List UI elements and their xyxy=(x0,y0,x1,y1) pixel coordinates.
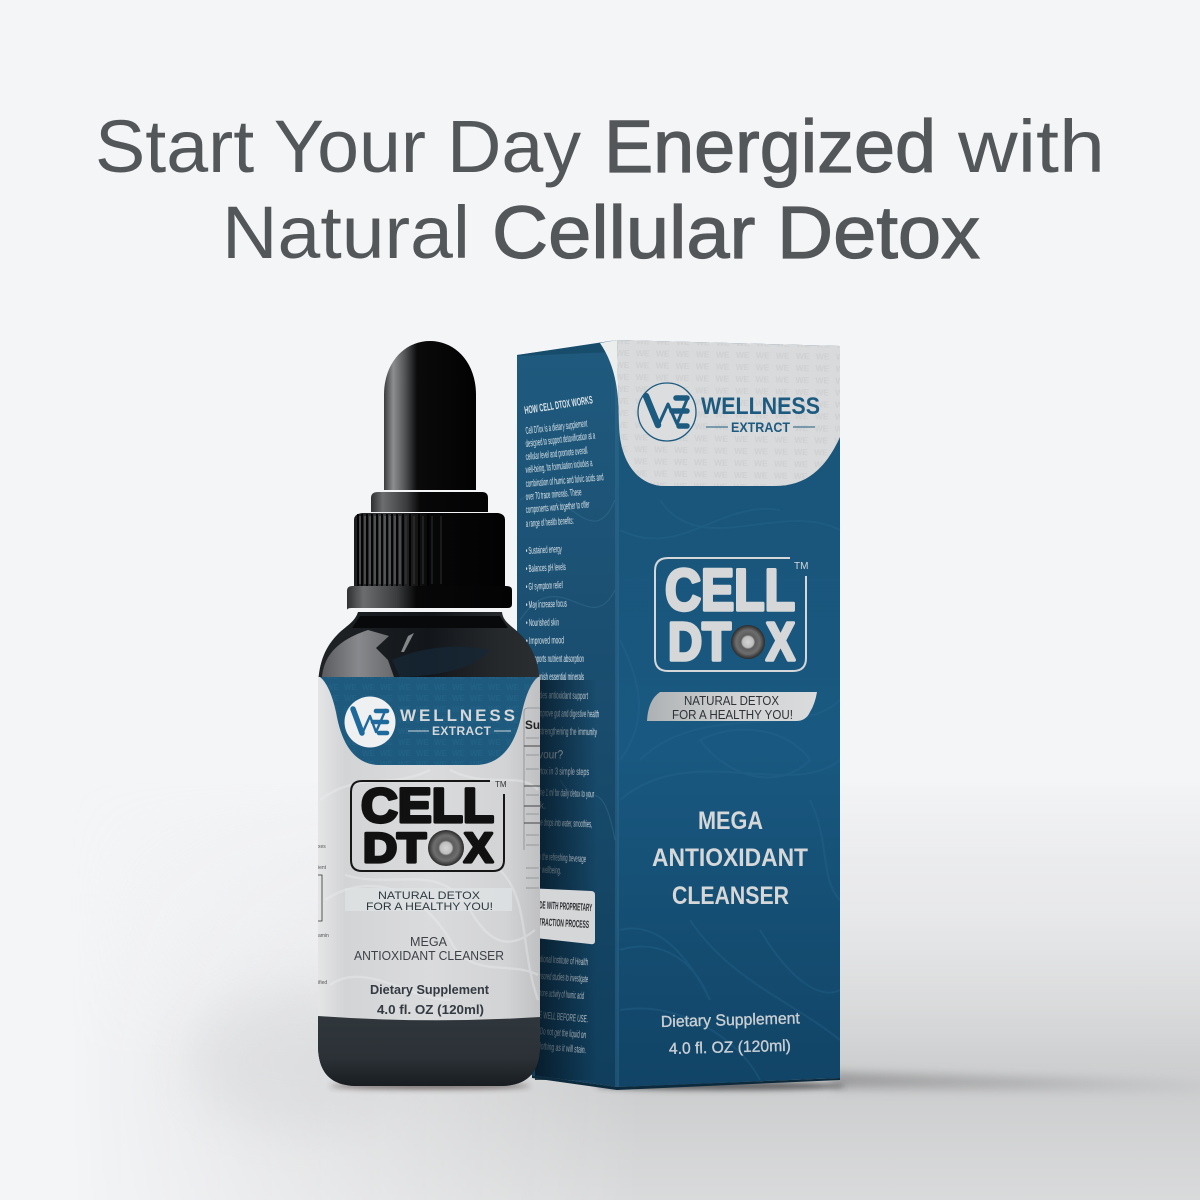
box side panel: • May improve gut and digestive health xyxy=(526,708,599,720)
box side panel text: cellular level and promote overall xyxy=(525,446,588,463)
box side panel text: SHAKE WELL BEFORE USE. xyxy=(526,1009,588,1025)
box side panel text: Cell DTox is a dietary supplement xyxy=(525,418,588,437)
cell icon xyxy=(731,625,765,659)
box side panel text: Cell Dtox in 3 simple steps xyxy=(526,766,589,778)
logo mark xyxy=(638,383,696,441)
box side panel: 1. Add the 1 ml for daily detox to your xyxy=(526,787,595,800)
box side panel: has sponsored studies to investigate xyxy=(526,970,589,985)
box side panel text: • GI symptom relief xyxy=(526,580,563,593)
title: Natural xyxy=(222,191,470,274)
label product description: ANTIOXIDANT CLEANSER xyxy=(354,949,504,963)
left wrap text: amin xyxy=(318,933,329,939)
box side panel text: 3. Enjoy the refreshing beverage xyxy=(526,851,587,865)
box side panel text: the hormone activity of humic acid xyxy=(526,987,584,1002)
box tagline: NATURAL DETOX xyxy=(684,694,780,708)
box side panel text: Savour? xyxy=(526,747,563,762)
box side panel text: The National Institute of Health xyxy=(526,953,588,968)
label cell dtox logo: CELL xyxy=(361,780,494,833)
box side panel text: • Sustained energy xyxy=(526,544,562,557)
bottle base xyxy=(318,1016,540,1086)
label product description: MEGA xyxy=(410,935,448,949)
dropper bulb xyxy=(384,341,476,490)
label product description xyxy=(354,935,504,963)
label cell dtox logo xyxy=(351,780,507,871)
box side panel text: a range of health benefits: xyxy=(525,516,574,530)
box cell dtox logo: TM xyxy=(794,561,808,572)
box product description: ANTIOXIDANT xyxy=(652,844,808,872)
box side panel text xyxy=(524,394,604,1056)
box side panel text: HOW CELL DTOX WORKS xyxy=(524,394,594,417)
ribbed cap xyxy=(354,513,505,586)
label tagline: NATURAL DETOX xyxy=(378,890,481,902)
label brand name: EXTRACT xyxy=(432,724,492,738)
label blue header xyxy=(320,677,538,765)
label brand name xyxy=(400,706,515,738)
background xyxy=(166,844,1200,1200)
box volume text: 4.0 fl. OZ (120ml) xyxy=(669,1038,791,1058)
box product description xyxy=(652,807,808,910)
label volume text: 4.0 fl. OZ (120ml) xyxy=(377,1003,484,1017)
title: Cellular Detox xyxy=(492,191,980,274)
box side panel text: your clothing as it will stain. xyxy=(526,1040,586,1056)
label tagline: FOR A HEALTHY YOU! xyxy=(366,901,493,913)
label marble swirls xyxy=(320,770,538,1000)
title: Start Your Day xyxy=(95,105,581,188)
box volume text: Dietary Supplement xyxy=(661,1010,801,1031)
floor shadows xyxy=(330,1072,1200,1092)
label volume text: Dietary Supplement xyxy=(370,983,490,997)
box side panel text: • Supports nutrient absorption xyxy=(526,654,584,665)
box cell dtox logo xyxy=(655,558,808,672)
box product description: MEGA xyxy=(698,807,763,835)
title xyxy=(95,105,1105,274)
product box: combination of humic and fulvic acids and xyxy=(525,472,604,490)
title: Energized xyxy=(604,105,936,188)
box side panel text: • Improved mood xyxy=(526,635,564,647)
supplement facts wrap xyxy=(524,708,540,888)
bottle glass xyxy=(318,612,540,1086)
box front panel xyxy=(532,340,840,1090)
box side panel: MADE WITH PROPRIETARY xyxy=(532,899,592,914)
label cell dtox logo: TM xyxy=(495,780,507,789)
dropper bottle xyxy=(318,341,540,1086)
proprietary process badge xyxy=(526,888,595,944)
label logo mark xyxy=(344,696,396,748)
box side panel text: • May increase focus xyxy=(526,599,567,611)
box side panel text: drink. xyxy=(526,800,546,812)
box gray logo cap xyxy=(600,340,840,486)
product box xyxy=(517,340,840,1090)
label volume text xyxy=(370,983,490,1017)
label brand name: WELLNESS xyxy=(400,706,515,725)
dropper collar xyxy=(371,492,488,512)
box logo: wellness extract xyxy=(638,383,820,441)
left wrap text xyxy=(318,844,329,986)
box side panel text: over 70 trace minerals. These xyxy=(525,487,582,503)
box side panel text: • Provides antioxidant support xyxy=(526,690,588,702)
box fold edge xyxy=(615,340,619,1087)
box side panel text: components work together to offer xyxy=(525,499,590,516)
left wrap text: ified xyxy=(318,980,327,986)
box tagline: FOR A HEALTHY YOU! xyxy=(672,708,793,722)
box side panel text: • Balances pH levels xyxy=(526,562,566,575)
label cell dtox logo: DT xyxy=(363,824,426,871)
box cell dtox logo: X xyxy=(766,612,795,672)
title: with xyxy=(957,105,1105,188)
box side panel: 2. Stir the drops into water, smoothies, xyxy=(526,817,592,830)
box side panel: well-being. Its formulation includes a xyxy=(525,458,593,476)
label tagline xyxy=(345,888,512,913)
left wrap text: ient xyxy=(318,865,327,871)
box side panel xyxy=(517,340,617,1087)
box cell dtox logo: DT xyxy=(668,612,731,672)
cell icon xyxy=(428,830,464,866)
box logo: wellness extract: WELLNESS xyxy=(701,393,820,420)
box tagline xyxy=(647,692,817,722)
box side panel: designed to support detoxification at a xyxy=(525,431,596,450)
box side panel text: for your wellbeing. xyxy=(526,864,561,877)
glass reflections xyxy=(322,630,394,677)
left wrap text: xes xyxy=(318,844,326,850)
cap ring xyxy=(347,586,512,610)
box side panel text: Avoid. Do not get the liquid on xyxy=(526,1025,586,1041)
label cell dtox logo: X xyxy=(464,824,493,871)
box logo: wellness extract: EXTRACT xyxy=(731,419,790,435)
box side panel text: • May strengthening the immunity xyxy=(526,726,597,738)
box product description: CLEANSER xyxy=(672,882,789,910)
supplement facts wrap: Su xyxy=(525,718,540,732)
box side panel text: • Replenish essential minerals xyxy=(526,672,584,683)
bottle label xyxy=(318,677,540,1022)
box volume text xyxy=(661,1010,801,1058)
proprietary process badge: EXTRACTION PROCESS xyxy=(532,916,589,931)
box cell dtox logo: CELL xyxy=(665,558,795,623)
box side panel text: • Nourished skin xyxy=(526,617,559,629)
